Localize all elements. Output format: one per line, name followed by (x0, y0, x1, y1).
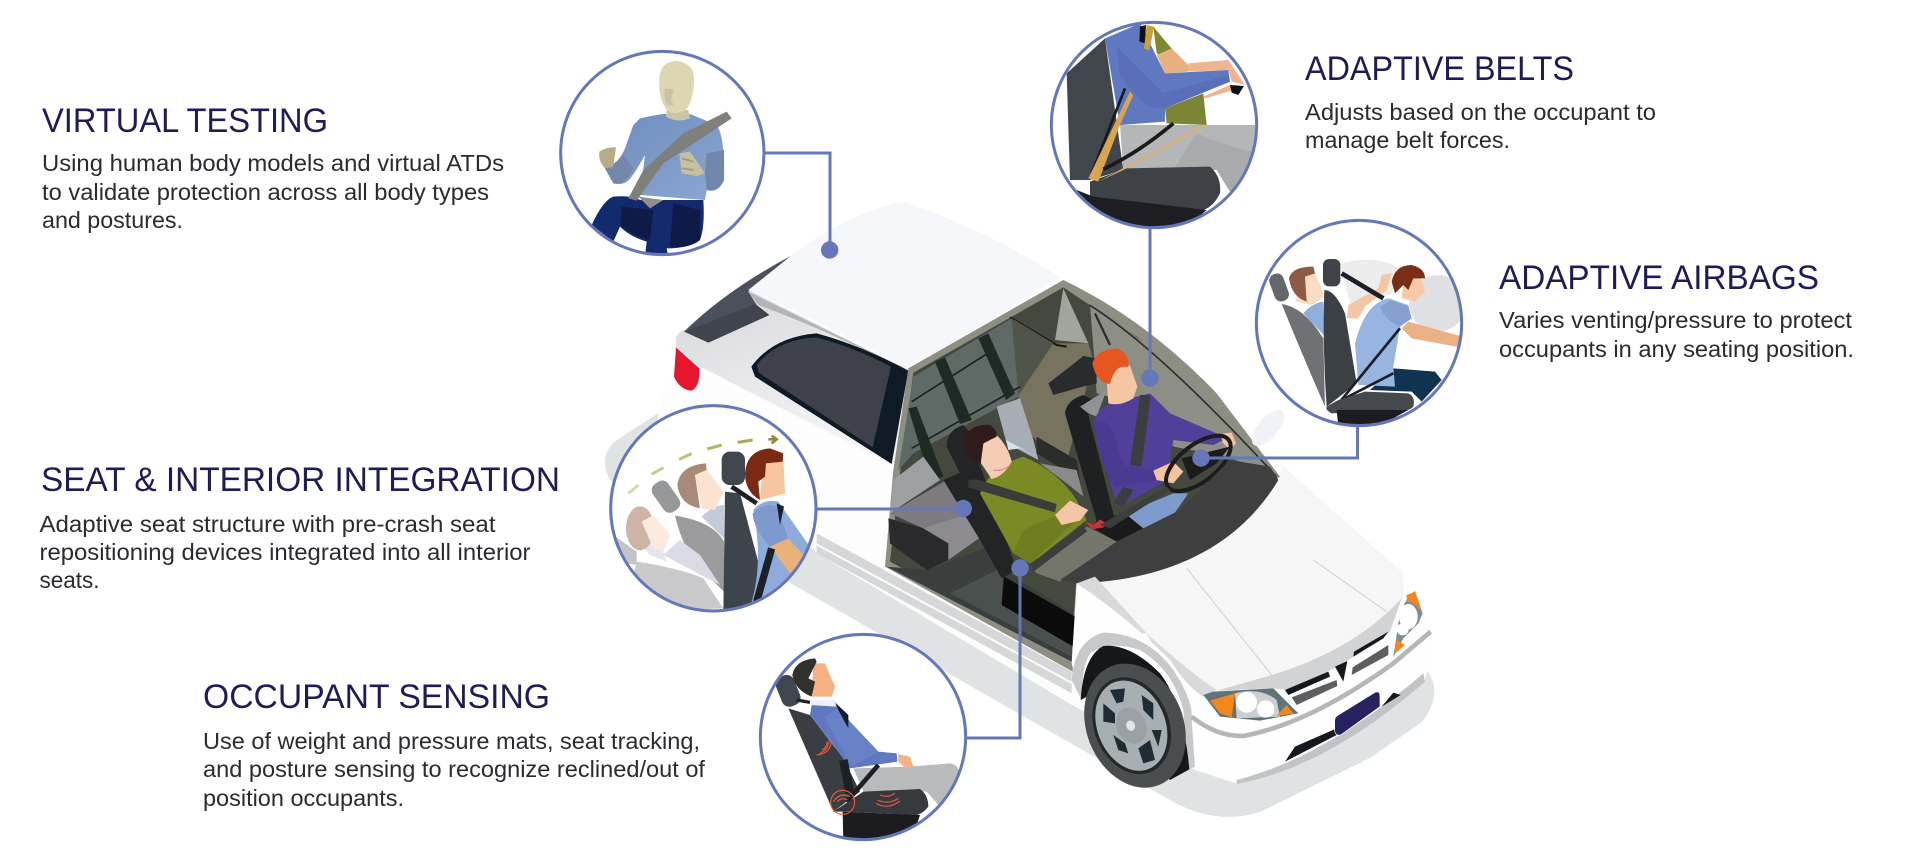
rear occupant (1267, 267, 1392, 407)
circle: adaptive airbags (1256, 220, 1466, 427)
body text (203, 728, 706, 811)
occupant arm (1105, 23, 1230, 125)
belts (843, 760, 850, 793)
floor (887, 543, 1073, 662)
tail light (674, 347, 699, 391)
car body (658, 202, 1432, 783)
belts (1342, 273, 1383, 298)
body text: Adjusts based on the occupant to (1305, 99, 1656, 125)
connector: occupant sensing (966, 559, 1029, 738)
occupant (792, 658, 913, 769)
body text: seats. (40, 567, 100, 593)
body text: and posture sensing to recognize reclined/out of (203, 756, 706, 782)
circle: adaptive belts (1051, 22, 1260, 230)
car illustration (605, 202, 1434, 817)
cabin frame (885, 280, 1280, 672)
rear airbag (1340, 260, 1399, 304)
passenger (963, 425, 1088, 568)
number plate (1335, 692, 1380, 735)
dashed move arc (628, 436, 777, 493)
right headlamp (1393, 591, 1423, 657)
circle: occupant sensing (760, 634, 966, 842)
door sill and cabin (817, 280, 1280, 693)
text: adaptive airbags (1499, 259, 1854, 362)
connector: seat integration (816, 500, 972, 517)
rear windscreen (684, 256, 791, 343)
steering wheel grip (1230, 85, 1244, 95)
fender (1072, 583, 1432, 783)
dashboard (1060, 460, 1278, 583)
front occupant seat (723, 492, 760, 612)
lower bumper (1237, 673, 1425, 784)
connector: adaptive airbags (1192, 426, 1358, 467)
bumper line (1192, 632, 1431, 736)
body text (42, 150, 504, 233)
seat (776, 674, 801, 707)
front seat (1324, 290, 1357, 407)
text: virtual testing (42, 102, 504, 233)
side mirror (1246, 405, 1290, 451)
body text: Use of weight and pressure mats, seat tracking, (203, 728, 700, 754)
text: occupant sensing (203, 678, 706, 811)
body text (40, 511, 531, 593)
windshield view (1090, 305, 1277, 477)
rear seat cushions (890, 457, 940, 513)
hood (1077, 466, 1404, 690)
circle: seat and interior integration (611, 406, 816, 612)
heading: OCCUPANT SENSING (203, 678, 550, 716)
heading: ADAPTIVE AIRBAGS (1499, 259, 1819, 297)
ghost position 1 (613, 506, 723, 612)
front occupant (1355, 265, 1460, 402)
body text (1305, 99, 1656, 153)
grille (1285, 632, 1388, 705)
belt (628, 112, 732, 201)
text: adaptive belts (1305, 50, 1656, 153)
heading: SEAT & INTERIOR INTEGRATION (41, 461, 560, 499)
connector lines and dots (765, 153, 1358, 738)
roof (748, 202, 1060, 370)
belts (1092, 88, 1125, 173)
rear side window (751, 333, 908, 464)
body text: Adaptive seat structure with pre-crash seat (40, 511, 496, 537)
body text (1499, 307, 1854, 362)
front of car (1060, 460, 1432, 803)
crash dummy head (666, 110, 690, 120)
ghost position 2 (649, 463, 724, 592)
body text: position occupants. (203, 785, 404, 811)
body text: manage belt forces. (1305, 127, 1510, 153)
cushion (1090, 167, 1220, 210)
hands (599, 147, 616, 168)
cushion (833, 789, 928, 815)
circle: virtual testing (561, 51, 764, 257)
body text: repositioning devices integrated into all interior (40, 539, 531, 565)
wheel (1066, 648, 1204, 803)
wheel arch (1072, 633, 1195, 770)
sensor waves (817, 738, 900, 814)
rear headrest (1048, 356, 1097, 395)
car rear upper body (674, 202, 1060, 465)
car ground shadow (605, 412, 1434, 817)
hood front band (1217, 598, 1402, 691)
connector: virtual testing (765, 153, 838, 259)
cushion (1326, 392, 1414, 413)
occupant skin and shirt (1154, 27, 1172, 54)
crash dummy legs (592, 196, 704, 257)
front occupant (745, 448, 813, 602)
heading: VIRTUAL TESTING (42, 102, 328, 140)
crash dummy torso (605, 114, 724, 200)
body text: Varies venting/pressure to protect (1499, 307, 1853, 333)
body text: occupants in any seating position. (1499, 336, 1854, 362)
front airbag (1409, 275, 1460, 331)
left headlamp (1203, 688, 1298, 721)
interior (1120, 125, 1260, 192)
body text: to validate protection across all body types (42, 179, 489, 205)
text: seat and interior integration (40, 461, 560, 593)
cabin interior (887, 287, 1277, 662)
body text: Using human body models and virtual ATDs (42, 150, 504, 176)
occupant legs (853, 763, 959, 807)
driver seat (1065, 395, 1115, 521)
passenger seat (947, 425, 980, 473)
seat buckle (1085, 519, 1107, 529)
heading: ADAPTIVE BELTS (1305, 50, 1574, 88)
body text: and postures. (42, 207, 183, 233)
rear seat back panel (898, 318, 1053, 470)
seat (1067, 38, 1123, 180)
driver (1092, 348, 1240, 528)
connector: adaptive belts (1141, 228, 1159, 387)
